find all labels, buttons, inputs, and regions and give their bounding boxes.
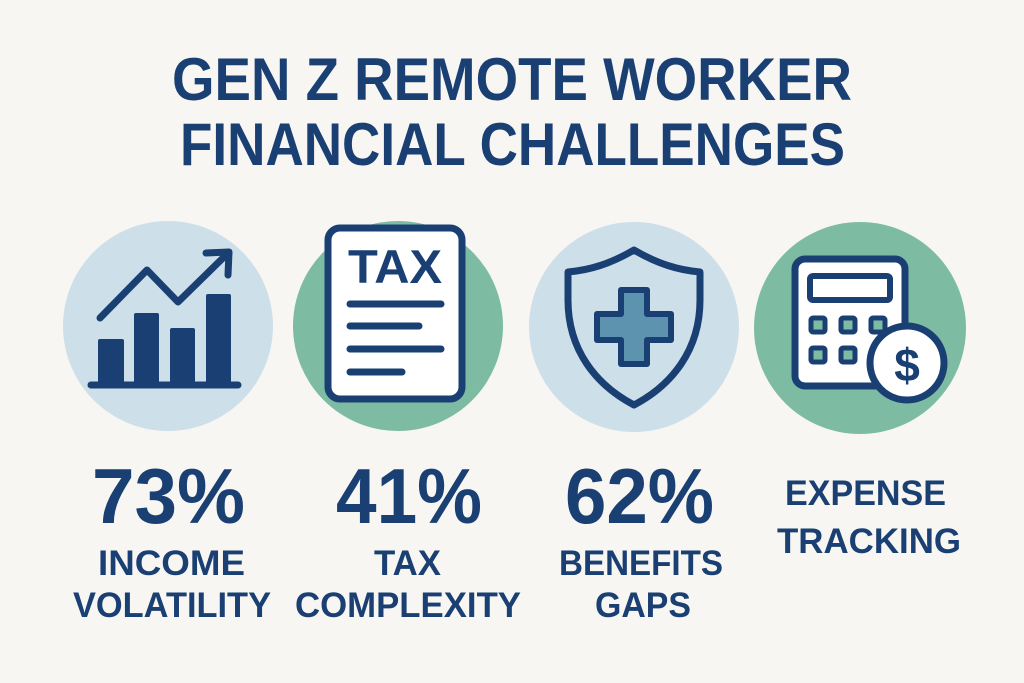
icon: shield with cross [529,222,739,432]
label: income volatility: INCOME [98,544,245,583]
label: expense tracking [777,474,961,561]
label: tax complexity: COMPLEXITY [295,586,521,625]
label: tax complexity [295,544,521,625]
label: benefits gaps: GAPS [595,586,691,625]
stat: 41%: 41% [336,452,482,540]
stat: 62%: 62% [565,452,714,540]
title: GEN Z REMOTE WORKER [172,46,852,113]
icon: tax document: TAX [348,240,442,293]
panel: income volatility [63,221,273,625]
stat: 73%: 73% [92,452,245,540]
label: expense tracking: EXPENSE [785,474,946,513]
label: tax complexity: TAX [374,544,442,583]
label: income volatility [73,544,271,625]
label: income volatility: VOLATILITY [73,586,271,625]
panel: benefits gaps [529,222,739,625]
icon: calculator with coin: $ [894,339,920,391]
panel: tax complexity [293,221,521,625]
label: benefits gaps: BENEFITS [559,544,723,583]
label: expense tracking: TRACKING [777,522,961,561]
icon: calculator with coin [754,222,966,434]
title [172,46,852,178]
title: FINANCIAL CHALLENGES [180,111,845,178]
icon: tax document [293,221,503,431]
panel: expense tracking [754,222,966,561]
icon: bar chart with arrow [63,221,273,431]
label: benefits gaps [559,544,723,625]
